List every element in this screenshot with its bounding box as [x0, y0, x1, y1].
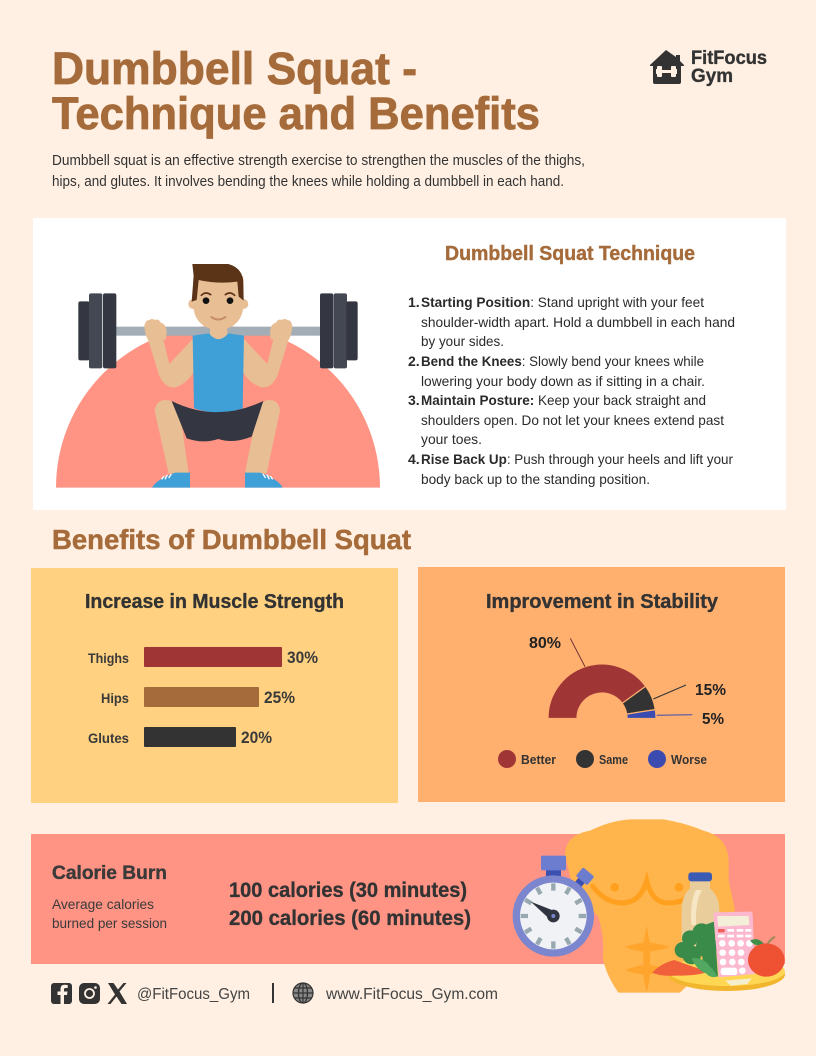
step 2: Bend the Knees: Slowly bend your knees while [421, 353, 704, 369]
icon: plate [668, 957, 785, 991]
panel: technique [33, 218, 786, 510]
bar chart: Hips [101, 690, 129, 706]
legend: Worse [671, 753, 707, 767]
step 2 [408, 353, 705, 389]
legend [498, 750, 707, 768]
panel: calorie burn: Calorie Burn [52, 863, 167, 884]
step 1: shoulder-width apart. Hold a dumbbell in each hand [421, 314, 735, 330]
step 3: Maintain Posture: Keep your back straight and [421, 392, 706, 408]
panel: stability [418, 567, 785, 802]
step 4: body back up to the standing position. [421, 471, 650, 487]
logo: FitFocus Gym: Gym [691, 66, 733, 87]
calorie description: burned per session [52, 916, 167, 931]
heading: technique: Dumbbell Squat Technique [445, 243, 695, 265]
title: Technique and Benefits [52, 88, 540, 139]
logo: FitFocus Gym [650, 48, 767, 87]
illustration: torso, stopwatch and diet [513, 819, 785, 993]
legend: Same [599, 753, 628, 767]
bar chart: Thighs [88, 650, 129, 666]
calorie figures: 200 calories (60 minutes) [229, 907, 471, 930]
step 3: your toes. [421, 431, 482, 447]
legend: Better [521, 753, 556, 767]
title: Dumbbell Squat - [52, 43, 417, 94]
icon: X [108, 983, 127, 1004]
panel: muscle strength: Increase in Muscle Strength [85, 591, 344, 613]
icon: broccoli [675, 922, 718, 977]
step 3 [408, 392, 724, 447]
icon: apple [748, 937, 785, 977]
step 1 [408, 294, 735, 349]
step 3: shoulders open. Do not let your knees extend past [421, 412, 724, 428]
website: www.FitFocus_Gym.com [325, 986, 498, 1003]
step 2: 2. [408, 353, 420, 369]
calorie figures [229, 879, 471, 930]
icon: facebook [51, 983, 72, 1004]
step 4 [408, 451, 733, 487]
calorie figures: 100 calories (30 minutes) [229, 879, 467, 902]
intro text: hips, and glutes. It involves bending the knees while holding a dumbbell in each hand. [52, 174, 564, 190]
panel: stability: Improvement in Stability [486, 591, 719, 613]
icon: stopwatch [513, 856, 594, 957]
semi-donut chart [529, 635, 726, 728]
illustration: man squatting with barbell [56, 264, 380, 488]
calorie description: Average calories [52, 897, 154, 912]
bar chart: 25% [264, 689, 295, 707]
semi-donut chart: 80% [529, 635, 561, 652]
icon: torso [565, 819, 735, 993]
technique steps list [408, 294, 735, 487]
icon: bottle [682, 872, 719, 950]
step 1: Starting Position: Stand upright with your feet [421, 294, 704, 310]
title [52, 43, 540, 139]
panel: calorie burn [31, 834, 785, 964]
intro text [52, 153, 585, 190]
footer: social links [51, 983, 498, 1004]
panel: muscle strength [31, 568, 398, 803]
bar chart: Glutes [88, 730, 129, 746]
icon: carrot [652, 960, 707, 976]
step 2: lowering your body down as if sitting in a chair. [421, 373, 705, 389]
icon: house with dumbbell [650, 50, 684, 84]
semi-donut chart: 15% [695, 682, 726, 699]
bar chart: 30% [287, 649, 318, 667]
icon: calculator [713, 912, 755, 977]
semi-donut chart: 5% [702, 711, 724, 728]
step 3: 3. [408, 392, 420, 408]
calorie description [52, 897, 167, 931]
logo: FitFocus Gym: FitFocus [691, 48, 767, 69]
icon: instagram [79, 983, 100, 1004]
man [144, 264, 292, 488]
heading: benefits: Benefits of Dumbbell Squat [52, 524, 411, 555]
barbell [78, 293, 358, 368]
step 1: by your sides. [421, 333, 504, 349]
intro text: Dumbbell squat is an effective strength exercise to strengthen the muscles of the thighs, [52, 153, 585, 169]
step 4: 4. [408, 451, 420, 467]
bar chart [88, 647, 318, 747]
step 1: 1. [408, 294, 420, 310]
icon: globe [293, 983, 313, 1003]
step 4: Rise Back Up: Push through your heels and lift your [421, 451, 733, 467]
bar chart: 20% [241, 729, 272, 747]
handle: @FitFocus_Gym [137, 986, 250, 1003]
